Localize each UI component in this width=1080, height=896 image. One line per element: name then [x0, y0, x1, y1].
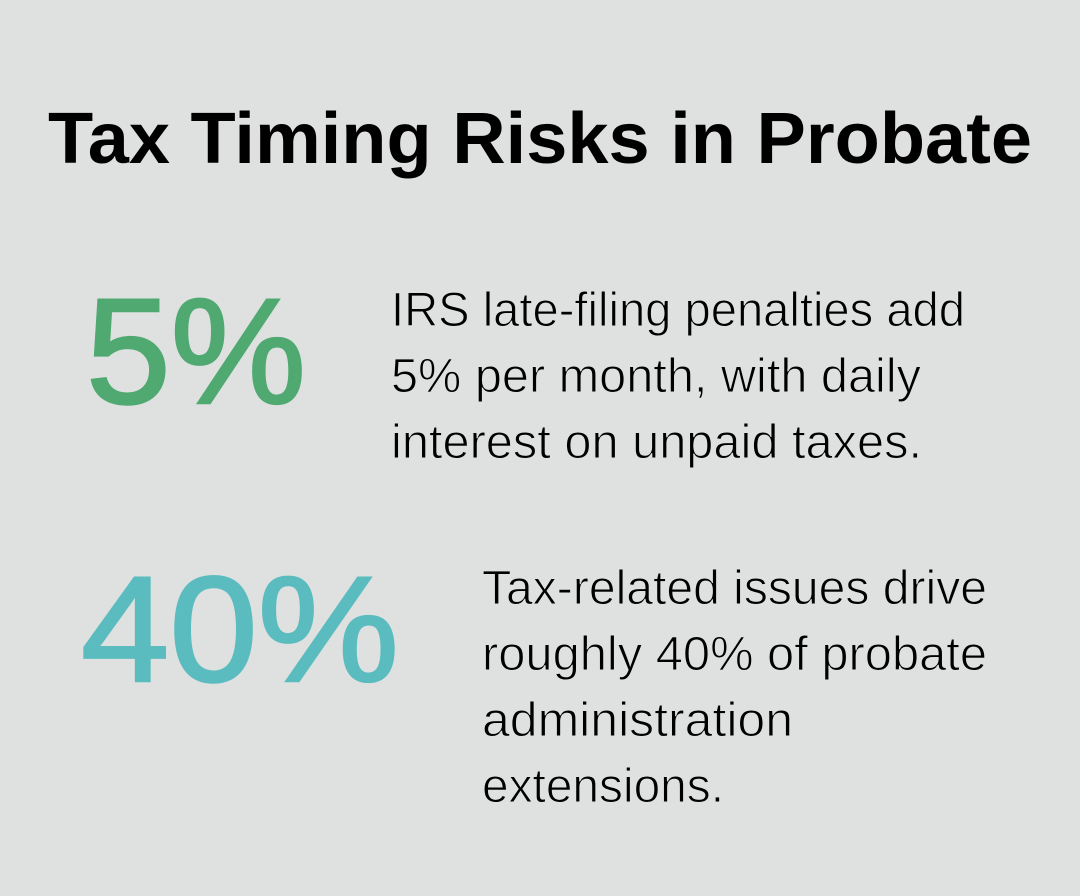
- text block: probate extensions: Tax-related issues drive: [482, 562, 987, 615]
- title: Tax Timing Risks in Probate: [48, 99, 1032, 179]
- text block: probate extensions: administration: [482, 694, 793, 747]
- text block: probate extensions: roughly 40% of probate: [482, 628, 987, 681]
- stat: 5%: 5%: [86, 267, 306, 435]
- text block: late-filing penalties: interest on unpaid taxes.: [391, 416, 922, 469]
- text block: late-filing penalties: IRS late-filing penalties add: [391, 284, 965, 337]
- text block: probate extensions: [482, 562, 987, 813]
- text block: late-filing penalties: [391, 284, 965, 469]
- stat: 40%: 40%: [81, 545, 399, 713]
- text block: late-filing penalties: 5% per month, with daily: [391, 350, 921, 403]
- text block: probate extensions: extensions.: [482, 760, 724, 813]
